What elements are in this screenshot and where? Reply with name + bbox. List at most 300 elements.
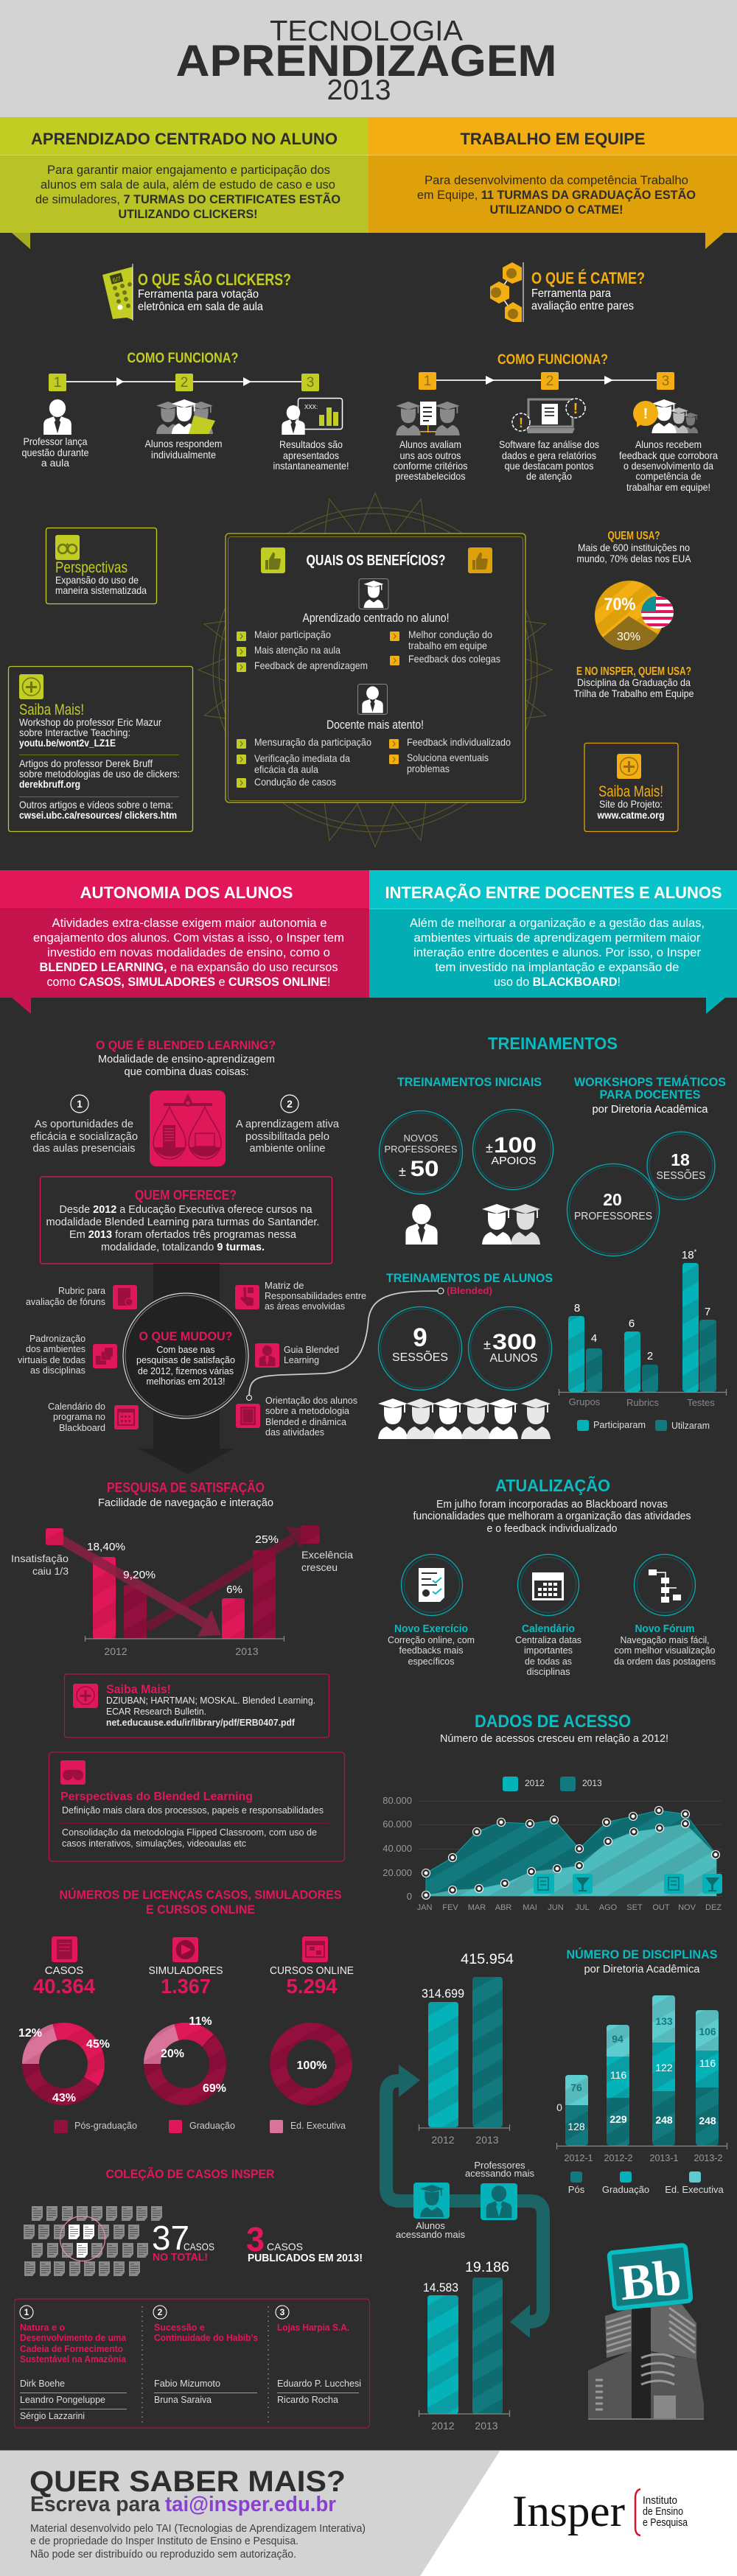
text block: o que é catme: avaliação entre pares (531, 300, 634, 312)
heading: dados de acesso: DADOS DE ACESSO (475, 1712, 631, 1732)
flow: como funciona clickers: 2 (181, 375, 188, 391)
icon: clicker (102, 264, 133, 321)
chart: donut casos: 12% (18, 2027, 42, 2040)
chart: numero de disciplinas: 0 (556, 2101, 562, 2113)
chart: area dados de acesso: 20.000 (383, 1867, 412, 1878)
stat: cursos online: CURSOS ONLINE (270, 1964, 354, 1977)
panel: perspectivas do blended learning: Definição mais clara dos processos, papeis e responsabilidades (62, 1805, 324, 1816)
stat: simuladores (149, 1937, 223, 1998)
icon item: guia: Guia Blended (284, 1344, 339, 1355)
feature: novo exercicio: específicos (408, 1656, 455, 1667)
panel: casos publicados: Lojas Harpia S.A. (277, 2323, 349, 2333)
panel: saiba mais catme: Saiba Mais! (598, 783, 663, 800)
legend: disciplinas (568, 2171, 724, 2195)
callout: presencial: das aulas presenciais (32, 1143, 136, 1155)
icon: alunos acessando: Alunos (416, 2220, 445, 2231)
header: title: APRENDIZAGEM (175, 36, 557, 85)
icon: balanca (150, 1091, 226, 1166)
panel: perspectivas clickers: Perspectivas (55, 559, 128, 576)
chart: pesquisa de satisfacao: caiu 1/3 (32, 1565, 69, 1577)
feature: calendario: Centraliza datas (515, 1634, 581, 1645)
panel: casos publicados: Desenvolvimento de uma (20, 2333, 127, 2343)
feature: calendario: importantes (524, 1645, 573, 1656)
panel: trabalho em equipe: TRABALHO EM EQUIPE (460, 130, 646, 148)
flow: como funciona catme: 3 (662, 374, 669, 389)
chart: area dados de acesso: 80.000 (383, 1795, 412, 1806)
legend: disciplinas: Ed. Executiva (665, 2184, 724, 2195)
panel: casos publicados: 3 (280, 2307, 285, 2317)
callout: online: possibilitada pelo (245, 1131, 329, 1143)
chart: numero de disciplinas: 229 (609, 2113, 627, 2125)
icon: resultados (282, 398, 342, 435)
icon item: rubric: avaliação de fóruns (26, 1296, 105, 1307)
flow: como funciona catme: 1 (424, 374, 431, 389)
panel: workshops tematicos: PARA DOCENTES (600, 1088, 700, 1102)
icon item: calendario: programa no (53, 1411, 105, 1422)
panel: aprendizado centrado no aluno: Para garantir maior engajamento e participação dos (47, 163, 330, 177)
panel: casos publicados: 1 (24, 2307, 29, 2317)
text: passos clickers: Resultados são (279, 438, 343, 450)
feature: novo forum (614, 1555, 716, 1667)
header: title: TECNOLOGIA (270, 15, 463, 47)
chart: participaram utilizaram (559, 1248, 727, 1431)
icon: software relatorios: ! (573, 401, 578, 417)
list: beneficios docente: Mensuração da participação (254, 736, 371, 748)
legend: treinamentos: Utilzaram (671, 1421, 710, 1431)
icon: software relatorios (512, 399, 585, 433)
feature: novo exercicio: Novo Exercício (394, 1623, 468, 1635)
chart: numero de disciplinas: 133 (655, 2015, 673, 2027)
heading: dados de acesso (440, 1712, 668, 1745)
callout: o que mudou (123, 1293, 248, 1418)
icon item: padronizacao: dos ambientes (26, 1343, 85, 1354)
flow: como funciona catme: COMO FUNCIONA? (497, 352, 608, 368)
stat: simuladores: 1.367 (161, 1975, 211, 1998)
panel: workshops tematicos: PROFESSORES (574, 1211, 652, 1222)
feature: novo exercicio (388, 1555, 475, 1667)
chart: pesquisa de satisfacao: Excelência (301, 1549, 353, 1561)
chart: participaram utilizaram: Rubrics (626, 1397, 660, 1408)
icon item: guia (255, 1343, 339, 1368)
panel: saiba mais clickers: youtu.be/wont2v_LZ1E (19, 737, 116, 749)
text block: o que são clickers: O QUE SÃO CLICKERS? (138, 270, 291, 289)
panel: saiba mais clickers: cwsei.ubc.ca/resources/ clickers.htm (19, 809, 177, 821)
list: beneficios docente: Verificação imediata da (254, 752, 350, 764)
chart: numero de disciplinas: 94 (612, 2033, 624, 2045)
panel: autonomia dos alunos: AUTONOMIA DOS ALUNOS (80, 883, 293, 902)
icon: resultados: XXX: (304, 404, 318, 410)
chart: area dados de acesso: OUT (652, 1903, 670, 1912)
callout: online: 2 (287, 1098, 293, 1110)
feature: calendario: Calendário (522, 1623, 575, 1635)
chart: participaram utilizaram: 6 (629, 1317, 635, 1330)
chart: numero de disciplinas: 2012-2 (604, 2153, 633, 2163)
icon: thumbs orange (468, 547, 492, 573)
legend: disciplinas: Pós (568, 2184, 585, 2195)
panel: treinamentos iniciais: APOIOS (491, 1155, 537, 1167)
icon item: padronizacao: as disciplinas (30, 1365, 85, 1376)
icon: alunos avaliam (396, 402, 460, 435)
stat: 3 casos: CASOS (267, 2241, 303, 2253)
icon: alunos acessando: acessando mais (396, 2229, 465, 2240)
heading: pesquisa de satisfacao: Facilidade de navegação e interação (98, 1497, 273, 1509)
panel: casos publicados: Continuidade do Habib's (154, 2333, 258, 2343)
panel: saiba mais clickers (9, 666, 193, 831)
text block: o que são clickers: Ferramenta para votação (138, 288, 259, 301)
chart: numero de disciplinas (556, 1947, 727, 2195)
chart: total acessos alunos: 314.699 (422, 1987, 464, 2001)
text block: o que é catme: O QUE É CATME? (531, 269, 645, 287)
panel: saiba mais clickers: Saiba Mais! (19, 701, 84, 718)
chart: numero de disciplinas: 122 (655, 2062, 673, 2073)
panel: workshops tematicos (567, 1075, 726, 1256)
icon item: orientacao: Orientação dos alunos (265, 1395, 357, 1406)
chart: numero de disciplinas: 2012-1 (565, 2153, 593, 2163)
text: o que é blended learning (96, 1038, 276, 1078)
panel: treinamentos iniciais: 50 (410, 1157, 439, 1181)
callout: presencial: eficácia e socialização (30, 1131, 138, 1143)
chart: pesquisa de satisfacao: cresceu (301, 1561, 338, 1573)
stat: 3 casos (246, 2220, 363, 2264)
panel: treinamentos iniciais: ± (486, 1141, 493, 1155)
text: passos clickers: apresentados (283, 449, 339, 461)
text: passos catme: Alunos avaliam (399, 438, 461, 450)
panel: treinamentos de alunos: SESSÕES (392, 1351, 448, 1364)
stat: 37 casos: 37 (152, 2219, 189, 2257)
feature: novo forum: Novo Fórum (635, 1623, 694, 1635)
text block: o que é catme: Ferramenta para (531, 287, 611, 300)
stat: 3 casos: 3 (246, 2220, 265, 2258)
icon item: calendario (48, 1401, 139, 1433)
list: beneficios aluno: Melhor condução do (408, 629, 492, 640)
chart: pesquisa de satisfacao: Insatisfação (11, 1553, 69, 1564)
chart: numero de disciplinas: 106 (699, 2026, 716, 2037)
panel: treinamentos de alunos: 9 (413, 1323, 427, 1352)
text: passos catme: feedback que corrobora (619, 449, 718, 461)
heading: numeros de licencas: NÚMEROS DE LICENÇAS CASOS, SIMULADORES (59, 1888, 342, 1902)
icon item: calendario: Blackboard (59, 1422, 105, 1433)
text block: atualizacao: e o feedback individualizado (486, 1522, 618, 1535)
panel: quem oferece: Desde 2012 a Educação Executiva oferece cursos na (59, 1204, 312, 1216)
panel: workshops tematicos: SESSÕES (656, 1169, 706, 1182)
footer: quer saber mais: QUER SABER MAIS? (29, 2465, 346, 2498)
panel: treinamentos iniciais: 100 (494, 1133, 537, 1158)
text: passos catme: o desenvolvimento da (624, 460, 713, 472)
panel: saiba mais catme: www.catme.org (597, 809, 665, 821)
stat: 3 casos: PUBLICADOS EM 2013! (248, 2253, 363, 2264)
panel: saiba mais catme (584, 743, 678, 831)
callout: online: A aprendizagem ativa (236, 1119, 340, 1130)
chart: numero de disciplinas: 116 (610, 2069, 626, 2081)
panel: perspectivas do blended learning: Perspectivas do Blended Learning (60, 1791, 253, 1803)
chart: area dados de acesso: MAR (468, 1903, 486, 1912)
panel: saiba mais clickers: derekbruff.org (19, 778, 80, 790)
logo: insper: Instituto (643, 2495, 677, 2507)
text: passos catme: Software faz análise dos (499, 438, 599, 450)
list: beneficios aluno: Mais atenção na aula (254, 644, 340, 656)
chart: area dados de acesso (383, 1777, 722, 1912)
text block: atualizacao: Em julho foram incorporadas ao Blackboard novas (436, 1498, 668, 1511)
list: beneficios aluno: trabalho em equipe (408, 640, 487, 651)
panel: treinamentos de alunos: ALUNOS (489, 1352, 538, 1365)
panel: saiba mais clickers: Workshop do professor Eric Mazur (19, 716, 161, 728)
panel: treinamentos de alunos: 300 (492, 1330, 537, 1354)
panel: saiba mais blended: net.educause.edu/ir/library/pdf/ERB0407.pdf (106, 1718, 296, 1728)
panel: aprendizado centrado no aluno: alunos em sala de aula, além de estudo de caso e uso (41, 178, 335, 192)
chart: donut casos: 45% (86, 2038, 110, 2051)
feature: novo forum: com melhor visualização (615, 1645, 715, 1656)
panel: perspectivas clickers: Expansão do uso de (55, 574, 139, 586)
icon item: padronizacao (18, 1333, 117, 1376)
panel: autonomia dos alunos: investido em novas modalidades de ensino, como o (47, 945, 330, 959)
panel: saiba mais blended: ECAR Research Bulletin. (106, 1707, 206, 1717)
feature: novo exercicio: Correção online, com (388, 1634, 475, 1645)
callout: o que mudou: de 2012, fizemos várias (138, 1365, 234, 1376)
icon item: orientacao: sobre a metodologia (265, 1405, 350, 1416)
icon: software relatorios: ! (519, 416, 523, 430)
chart: donut casos (18, 2027, 110, 2104)
panel: treinamentos iniciais: NOVOS (404, 1133, 439, 1144)
footer: quer saber mais: tai@insper.edu.br (165, 2493, 336, 2516)
chart: participaram utilizaram: * (694, 1248, 697, 1256)
icon item: rubric (26, 1285, 137, 1309)
text: o que é blended learning: O QUE É BLENDED LEARNING? (96, 1038, 276, 1052)
chart: participaram utilizaram: 7 (705, 1306, 710, 1318)
chart: area dados de acesso: JUL (575, 1903, 590, 1912)
panel: trabalho em equipe (368, 117, 737, 249)
text: quem usa (576, 530, 691, 564)
panel: saiba mais blended: Saiba Mais! (106, 1682, 171, 1696)
chart: pesquisa de satisfacao: 2012 (104, 1645, 128, 1657)
text: e no insper (573, 665, 694, 699)
flow: como funciona clickers: 1 (54, 375, 61, 391)
arrow: seta escura o que mudou (139, 1264, 234, 1474)
panel: quem oferece: modalidade, totalizando 9 turmas. (101, 1242, 265, 1253)
list: beneficios aluno: Feedback de aprendizagem (254, 659, 368, 671)
text: passos catme: competência de (635, 470, 702, 482)
footer: quer saber mais: Material desenvolvido pelo TAI (Tecnologias de Aprendizagem Interativa) (30, 2522, 366, 2535)
callout: online: ambiente online (249, 1143, 326, 1155)
text block: o que é catme (531, 269, 645, 312)
heading: pesquisa de satisfacao (98, 1480, 273, 1509)
icon: professores acessando: Professores (474, 2160, 525, 2171)
list: beneficios docente: problemas (407, 763, 450, 774)
panel: casos publicados: Natura e o (20, 2323, 65, 2333)
footer: quer saber mais (0, 2450, 737, 2576)
panel: workshops tematicos: por Diretoria Acadêmica (593, 1104, 708, 1116)
panel: quem oferece (40, 1177, 332, 1264)
chart: pesquisa de satisfacao: 9,20% (123, 1569, 156, 1581)
panel: treinamentos de alunos (378, 1271, 553, 1439)
legend: anos (503, 1777, 602, 1791)
panel: workshops tematicos: WORKSHOPS TEMÁTICOS (574, 1075, 726, 1089)
panel: casos publicados: 2 (158, 2307, 163, 2317)
chart: participaram utilizaram: 2 (647, 1350, 653, 1362)
icon item: orientacao (236, 1395, 357, 1438)
panel: saiba mais blended: DZIUBAN; HARTMAN; MOSKAL. Blended Learning. (106, 1695, 315, 1706)
list: beneficios docente: Feedback individualizado (407, 736, 511, 748)
chart: participaram utilizaram: 18 (682, 1249, 694, 1261)
icon: bandeira eua (640, 596, 674, 629)
panel: quem oferece: modalidade Blended Learning para turmas do Santander. (46, 1217, 320, 1228)
callout: presencial: 1 (77, 1098, 83, 1110)
chart: area dados de acesso: 0 (407, 1891, 412, 1902)
panel: interacao entre docentes e alunos: interação entre docentes e alunos. Por isso, o Insper (413, 945, 701, 959)
stat: 37 casos: CASOS (184, 2241, 214, 2253)
chart: numero de disciplinas: NÚMERO DE DISCIPLINAS (566, 1947, 718, 1961)
panel: aprendizado centrado no aluno: de simuladores, 7 TURMAS DO CERTIFICATES ESTÃO (35, 192, 340, 206)
panel: workshops tematicos: 20 (603, 1190, 622, 1209)
callout: o que mudou: Com base nas (156, 1344, 215, 1355)
stat: casos: 40.364 (33, 1975, 95, 1998)
icon item: orientacao: das atividades (265, 1427, 324, 1438)
icon: professores acessando (465, 2160, 534, 2220)
stat: 37 casos (152, 2219, 214, 2264)
panel: saiba mais blended (65, 1674, 329, 1737)
text: passos clickers: a aula (41, 457, 69, 469)
callout: presencial: As oportunidades de (35, 1119, 133, 1130)
chart: acessos professores: 19.186 (465, 2260, 509, 2275)
icon: aluno (359, 579, 388, 609)
icon item: rubric: Rubric para (58, 1285, 106, 1296)
chart: total acessos alunos: 415.954 (461, 1952, 514, 1967)
chart: pesquisa de satisfacao: 2013 (235, 1645, 259, 1657)
panel: quem oferece: QUEM OFERECE? (135, 1188, 237, 1203)
panel: saiba mais catme: Site do Projeto: (599, 798, 663, 810)
text: passos catme: preestabelecidos (395, 470, 466, 482)
footer: quer saber mais: Não pode ser distribuído ou reproduzido sem autorização. (30, 2548, 296, 2561)
stat: casos: CASOS (45, 1964, 83, 1977)
callout: o que mudou: O QUE MUDOU? (139, 1329, 233, 1343)
panel: quais os beneficios (226, 533, 525, 802)
panel: casos publicados: Eduardo P. Lucchesi (277, 2379, 361, 2389)
flow: como funciona clickers (49, 351, 319, 391)
text block: o que são clickers (138, 270, 291, 313)
panel: treinamentos iniciais: PROFESSORES (385, 1144, 458, 1155)
text block: atualizacao: ATUALIZAÇÃO (495, 1475, 610, 1495)
icon: fila de alunos (378, 1399, 551, 1439)
callout: o que mudou: melhorias em 2013! (146, 1376, 226, 1387)
panel: interacao entre docentes e alunos: tem investido na implantação e expansão de (435, 960, 680, 974)
list: beneficios docente: Soluciona eventuais (407, 752, 489, 763)
panel: interacao entre docentes e alunos: Além de melhorar a organização e a gestão das aulas, (410, 916, 705, 930)
panel: treinamentos de alunos: (Blended) (447, 1286, 492, 1296)
chart: pesquisa de satisfacao: 6% (226, 1583, 242, 1596)
icons: marcos no grafico (534, 1874, 722, 1894)
panel: interacao entre docentes e alunos: uso do BLACKBOARD! (494, 975, 621, 989)
icon item: matriz: as áreas envolvidas (265, 1301, 345, 1312)
icon item: guia: Learning (284, 1354, 319, 1365)
panel: autonomia dos alunos: BLENDED LEARNING, e na expansão do uso recursos (40, 960, 338, 974)
flow: como funciona clickers: 3 (307, 375, 314, 391)
list: beneficios aluno (237, 629, 500, 788)
header: title (0, 0, 737, 117)
panel: casos publicados: Fabio Mizumoto (154, 2379, 220, 2389)
chart: area dados de acesso: DEZ (705, 1903, 722, 1912)
chart: area dados de acesso: FEV (442, 1903, 458, 1912)
chart: donut cursos online: 100% (297, 2059, 326, 2072)
text: quem usa: Mais de 600 instituições no (578, 542, 690, 553)
panel: autonomia dos alunos: como CASOS, SIMULADORES e CURSOS ONLINE! (47, 975, 330, 989)
arrow: ciclo acessos (386, 2065, 543, 2338)
list: beneficios aluno: Maior participação (254, 629, 331, 640)
chart: area dados de acesso: 40.000 (383, 1843, 412, 1854)
chart: pesquisa de satisfacao: 18,40% (87, 1541, 125, 1553)
icon: alunos recebem feedback: ! (643, 406, 648, 422)
text block: o que são clickers: eletrônica em sala de aula (138, 301, 263, 313)
chart: donut cursos online (279, 2031, 343, 2097)
panel: saiba mais clickers: Artigos do professor Derek Bruff (19, 757, 153, 769)
panel: aprendizado centrado no aluno: APRENDIZADO CENTRADO NO ALUNO (31, 130, 338, 148)
chart: donut simuladores (152, 2015, 226, 2097)
icon: clicker: 6/7 (112, 276, 122, 284)
panel: saiba mais clickers: Outros artigos e vídeos sobre o tema: (19, 799, 173, 811)
text block: atualizacao (413, 1475, 691, 1535)
heading: quais os beneficios: QUAIS OS BENEFÍCIOS? (307, 552, 445, 569)
panel: casos publicados: Sustentável na Amazônia (20, 2354, 127, 2365)
list: beneficios docente (254, 736, 511, 788)
chart: numero de disciplinas: 116 (699, 2057, 716, 2069)
text: docente mais atento: Docente mais atento! (326, 718, 424, 732)
legend: disciplinas: Graduação (602, 2184, 649, 2195)
text: o que é blended learning: que combina duas coisas: (124, 1065, 249, 1078)
chart: numero de disciplinas: 128 (567, 2121, 585, 2132)
chart: area dados de acesso: MAI (523, 1903, 537, 1912)
icon: professor (405, 1204, 438, 1245)
stat: cursos online: 5.294 (286, 1975, 338, 1998)
panel: casos publicados: Leandro Pongeluppe (20, 2395, 105, 2405)
chart: numero de disciplinas: 2013-1 (650, 2153, 679, 2163)
flow: como funciona catme: 2 (546, 374, 553, 389)
panel: perspectivas do blended learning: Consolidação da metodologia Flipped Classroom, com uso de (62, 1827, 317, 1838)
heading: dados de acesso: Número de acessos cresceu em relação a 2012! (440, 1732, 668, 1745)
heading: pesquisa de satisfacao: PESQUISA DE SATISFAÇÃO (107, 1480, 265, 1495)
panel: aprendizado centrado no aluno (0, 117, 368, 249)
chart: acessos professores: 2012 (431, 2420, 455, 2432)
text: passos clickers: Professor lança (24, 435, 88, 447)
callout: presencial (30, 1095, 138, 1155)
panel: autonomia dos alunos: Atividades extra-classe exigem maior autonomia e (52, 916, 327, 930)
text: o que é blended learning: Modalidade de ensino-aprendizagem (98, 1053, 275, 1065)
text: passos clickers: questão durante (22, 447, 89, 458)
icon: docente (358, 684, 388, 715)
icon: thumbs lime (261, 547, 285, 573)
chart: participaram utilizaram: Testes (687, 1397, 715, 1408)
panel: workshops tematicos: 18 (671, 1150, 690, 1169)
text: passos catme: dados e gera relatórios (502, 449, 596, 461)
panel: perspectivas clickers (46, 528, 156, 604)
flow: como funciona catme (419, 352, 674, 390)
panel: treinamentos de alunos: ± (483, 1337, 491, 1352)
text: quem usa: mundo, 70% delas nos EUA (576, 553, 691, 564)
text: e no insper: Trilha de Trabalho em Equipe (573, 687, 694, 699)
panel: treinamentos iniciais: ± (399, 1164, 406, 1179)
text: e no insper: E NO INSPER, QUEM USA? (576, 665, 691, 678)
icon item: matriz: Responsabilidades entre (265, 1290, 366, 1301)
stat: 37 casos: NO TOTAL! (153, 2251, 208, 2264)
text: passos catme: de atenção (526, 470, 572, 482)
text block: atualizacao: funcionalidades que melhoram a organização das atividades (413, 1510, 691, 1522)
flow: como funciona clickers: COMO FUNCIONA? (127, 351, 239, 366)
callout: o que mudou: pesquisas de satisfação (136, 1354, 235, 1365)
panel: casos publicados (15, 2299, 370, 2428)
panel: interacao entre docentes e alunos: ambientes virtuais de aprendizagem permitem maior (414, 931, 701, 945)
panel: casos publicados: Cadeia de Fornecimento (20, 2344, 123, 2354)
legend: treinamentos: Participaram (593, 1420, 646, 1430)
chart: acessos professores: 2013 (475, 2420, 498, 2432)
chart: participaram utilizaram: 8 (574, 1302, 580, 1315)
icon: alunos recebem feedback (633, 399, 698, 433)
